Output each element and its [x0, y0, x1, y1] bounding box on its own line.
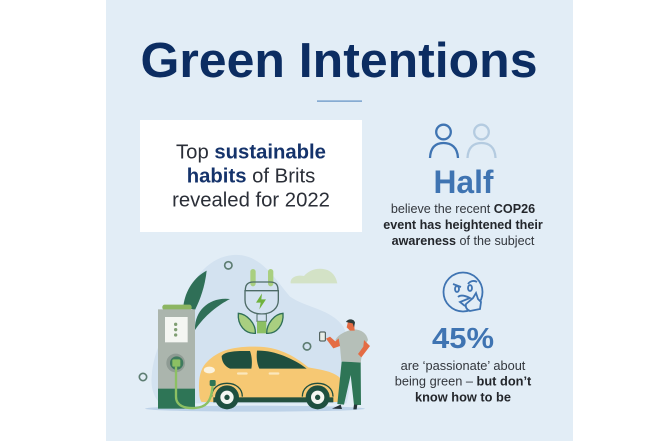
- illustration: EV charging: [139, 255, 370, 412]
- stat text: half: event has heightened their: [383, 218, 543, 232]
- background blob: [151, 255, 351, 403]
- charging cable: [176, 367, 213, 408]
- stat number: half: Half: [434, 164, 494, 200]
- cable connector: [210, 380, 216, 386]
- stat text: 45%: know how to be: [415, 390, 511, 404]
- stat text: 45%: being green – but don’t: [395, 374, 531, 388]
- panel: background: [106, 0, 573, 441]
- cloud: [291, 269, 337, 283]
- ground shadow: [145, 406, 365, 412]
- stat: 45%: [395, 272, 532, 404]
- headline text: Top sustainable: [176, 142, 326, 164]
- icon: two people: [430, 125, 496, 158]
- title divider: [317, 100, 362, 102]
- headline text: revealed for 2022: [172, 190, 330, 212]
- stat text: half: believe the recent COP26: [391, 202, 535, 216]
- title: Green Intentions: [140, 34, 538, 88]
- leaves behind charger: [183, 271, 230, 330]
- plug with leaves: [238, 269, 283, 333]
- headline text: habits of Brits: [187, 166, 315, 188]
- stat number: 45%: 45%: [432, 323, 494, 355]
- charging station: [158, 305, 195, 409]
- car: [199, 347, 346, 409]
- stat text: 45%: are ‘passionate’ about: [401, 358, 526, 373]
- icon: thinking face: [444, 272, 482, 312]
- stat text: half: awareness of the subject: [392, 234, 534, 248]
- stat: half: [383, 125, 543, 248]
- circle accents: [139, 262, 311, 381]
- panel: headline card: [140, 120, 362, 232]
- person: [320, 319, 370, 409]
